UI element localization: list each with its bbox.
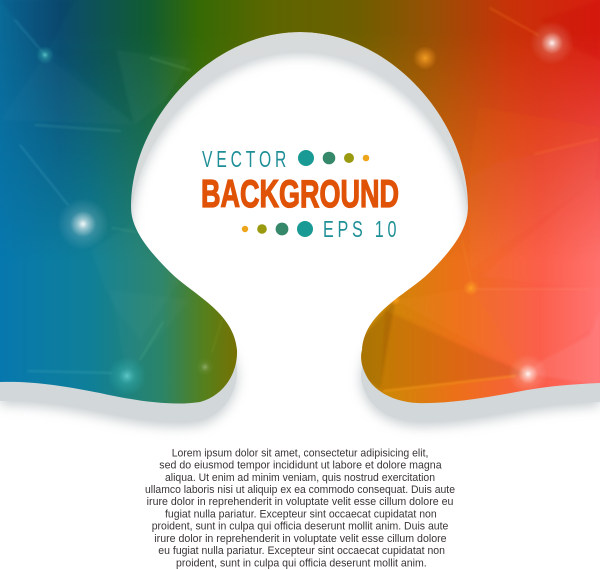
title: eps 10: EPS 10 — [323, 217, 396, 243]
title: background: BACKGROUND — [201, 173, 399, 216]
paper fold lip — [0, 19, 600, 423]
body text: proident, sunt in culpa qui officia deserunt mollit anim. — [176, 558, 427, 570]
body text: eu fugiat nulla pariatur. Excepteur sint occaecat cupidatat non — [158, 545, 445, 557]
polygon gradient background — [0, 0, 600, 420]
body text: sed do eiusmod tempor incididunt ut labore et dolore magna — [159, 460, 442, 472]
body text: irure dolor in reprehenderit in voluptate velit esse cillum dolore — [154, 533, 447, 545]
body text — [145, 447, 455, 570]
body text: proident, sunt in culpa qui officia deserunt mollit anim. Duis aute — [152, 521, 448, 533]
dots: bottom row — [242, 221, 313, 237]
title block — [201, 147, 399, 243]
sparkles — [36, 21, 574, 396]
body text: Lorem ipsum dolor sit amet, consectetur adipisicing elit, — [172, 447, 428, 459]
body text: irure dolor in reprehenderit in voluptate velit esse cillum dolore eu — [147, 496, 453, 508]
body text: fugiat nulla pariatur. Excepteur sint occaecat cupidatat non — [165, 508, 437, 520]
body text: aliqua. Ut enim ad minim veniam, quis nostrud exercitation — [165, 472, 435, 484]
paper shadow — [0, 23, 600, 427]
body text: ullamco laboris nisi ut aliquip ex ea commodo consequat. Duis aute — [145, 484, 455, 496]
dots: top row — [298, 150, 369, 166]
light streaks — [15, 8, 598, 391]
polygon facets — [112, 291, 599, 392]
title: vector: VECTOR — [202, 147, 286, 173]
